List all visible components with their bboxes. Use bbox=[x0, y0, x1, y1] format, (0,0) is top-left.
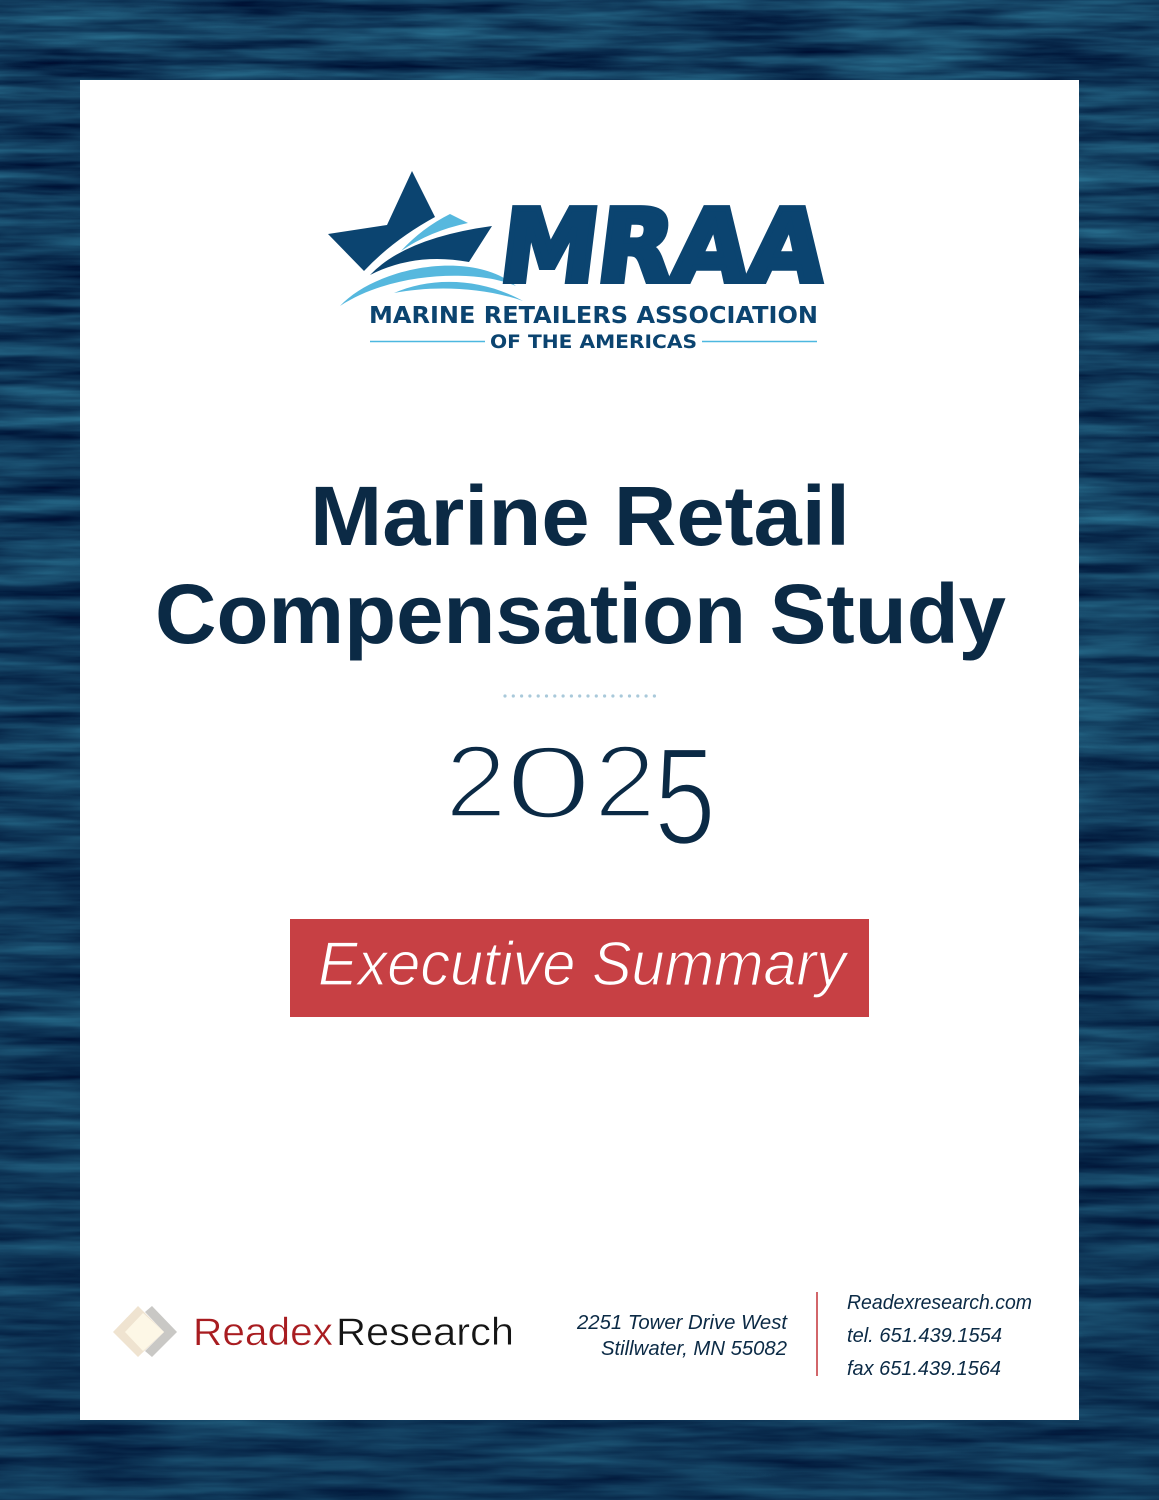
wordmark: ReadexResearch: Research bbox=[336, 1311, 514, 1354]
address bbox=[576, 1312, 788, 1360]
MRAA logo bbox=[328, 171, 833, 353]
icon: overlapping diamonds bbox=[113, 1306, 177, 1357]
year: 2025: 5 bbox=[654, 718, 716, 874]
wordmark: MRAA: MRAA bbox=[494, 188, 833, 305]
title: Compensation Study bbox=[155, 567, 1006, 661]
logo name line 2: OF THE AMERICAS bbox=[490, 331, 697, 353]
address: 2251 Tower Drive West bbox=[576, 1312, 788, 1334]
contact details: tel. 651.439.1554 bbox=[847, 1325, 1002, 1347]
year: 2025: 2 bbox=[594, 724, 656, 839]
year: 2025: 0 bbox=[505, 726, 592, 841]
year: 2025 bbox=[445, 718, 716, 874]
banner: Executive Summary bbox=[290, 919, 869, 1017]
title bbox=[155, 469, 1006, 661]
Readex Research logo bbox=[113, 1306, 514, 1357]
white cover panel bbox=[80, 80, 1079, 1420]
contact details bbox=[847, 1292, 1032, 1380]
logo name line 1: MARINE RETAILERS ASSOCIATION bbox=[369, 303, 818, 329]
address: Stillwater, MN 55082 bbox=[601, 1338, 787, 1360]
contact details: Readexresearch.com bbox=[847, 1292, 1032, 1314]
icon: star boat bbox=[328, 171, 523, 306]
year: 2025: 2 bbox=[445, 724, 507, 839]
title: Marine Retail bbox=[310, 469, 850, 563]
banner: Executive Summary: Executive Summary bbox=[318, 930, 850, 999]
wordmark: ReadexResearch: Readex bbox=[193, 1311, 334, 1354]
contact details: fax 651.439.1564 bbox=[847, 1358, 1001, 1380]
